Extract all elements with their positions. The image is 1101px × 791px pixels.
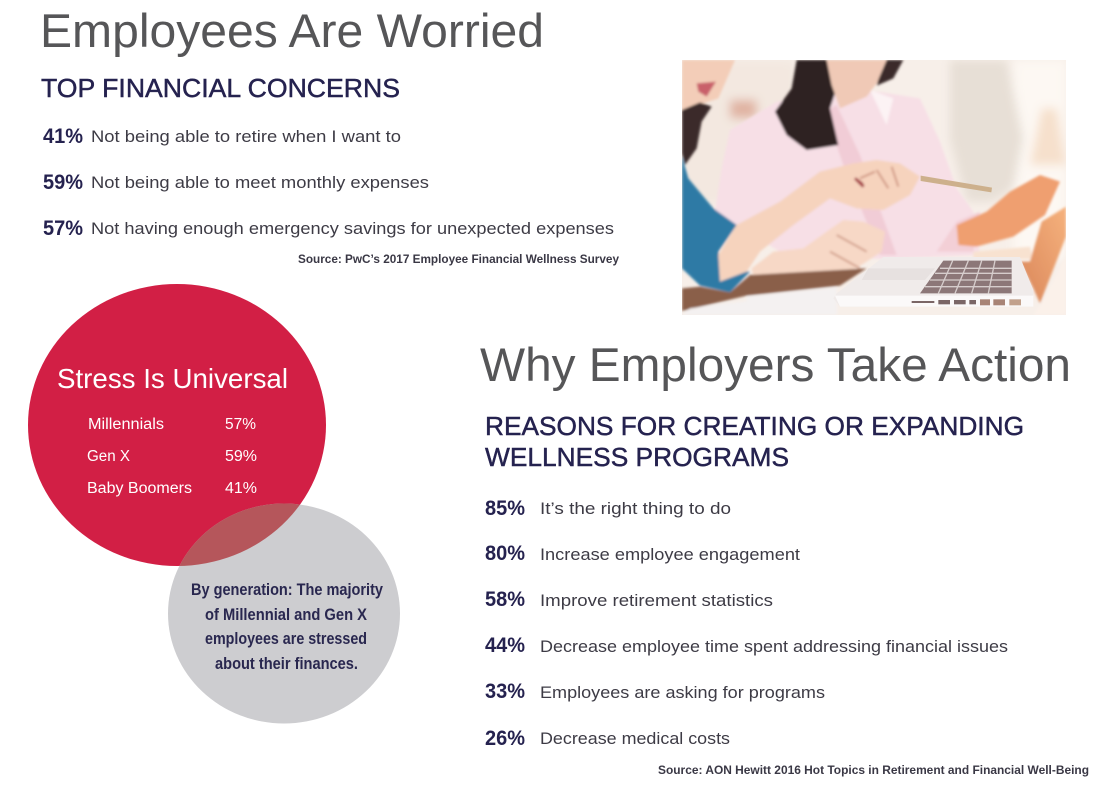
panel: reasons for wellness programs [485, 411, 1089, 777]
laptop base [862, 257, 1034, 292]
reason: asking for programs: Employees are asking for programs [540, 683, 825, 702]
circle: grey generation note [168, 504, 400, 724]
heading: reasons: REASONS FOR CREATING OR EXPANDING [485, 411, 1024, 441]
row: gen x: 59% [225, 448, 257, 465]
title: Why Employers Take Action: Why Employers Take Action [480, 338, 1071, 391]
cuff [937, 212, 980, 252]
source: PwC: Source: PwC’s 2017 Employee Financial Wellness Survey [298, 254, 620, 266]
concern: monthly expenses: 59% [43, 171, 83, 194]
reason: right thing: It’s the right thing to do [540, 499, 731, 518]
reason: engagement: 80% [485, 542, 525, 565]
row: millennials: Millennials [88, 416, 164, 433]
reason: medical costs: 26% [485, 727, 525, 750]
reason: asking for programs: 33% [485, 680, 525, 703]
concern: monthly expenses [43, 171, 429, 194]
reason: asking for programs [485, 680, 825, 703]
right hand [957, 175, 1060, 247]
ports [912, 299, 1021, 305]
concern: emergency savings: 57% [43, 217, 83, 240]
reason: time spent: Decrease employee time spent addressing financial issues [540, 637, 1008, 656]
keyboard [920, 261, 1012, 293]
pen hand details [860, 167, 898, 188]
text: generation note: about their finances. [215, 655, 358, 673]
reason: medical costs: Decrease medical costs [540, 729, 730, 748]
reason: right thing: 85% [485, 497, 525, 520]
concern: retire: 41% [43, 125, 83, 148]
concern: retire [43, 125, 401, 148]
heading: stress is universal: Stress Is Universal [57, 363, 288, 394]
lower hand [752, 220, 885, 277]
table [682, 268, 867, 311]
row: millennials [88, 416, 256, 433]
heading: reasons [485, 411, 1024, 472]
forearm [718, 160, 920, 282]
reason: time spent: 44% [485, 634, 525, 657]
reason: right thing [485, 497, 731, 520]
row: millennials: 57% [225, 416, 256, 433]
circle: red stress is universal [28, 284, 326, 566]
concern: retire: Not being able to retire when I want to [91, 127, 401, 146]
text: generation note: By generation: The majority [191, 581, 384, 599]
laptop screen [1020, 207, 1066, 303]
reason: time spent [485, 634, 1008, 657]
panel: top financial concerns [41, 73, 620, 266]
row: gen x [87, 448, 257, 465]
concern: emergency savings: Not having enough emergency savings for unexpected expenses [91, 219, 614, 238]
blue sleeve [682, 157, 750, 292]
text: generation note: of Millennial and Gen X [205, 606, 367, 624]
source: AON Hewitt: Source: AON Hewitt 2016 Hot Topics in Retirement and Financial Well-Being [658, 765, 1089, 777]
text: generation note [191, 581, 384, 673]
row: baby boomers: 41% [225, 480, 257, 497]
reason: retirement statistics: 58% [485, 588, 525, 611]
reason: retirement statistics [485, 588, 773, 611]
reason: engagement: Increase employee engagement [540, 545, 800, 564]
row: baby boomers: Baby Boomers [87, 480, 192, 497]
row: baby boomers [87, 480, 257, 497]
concern: monthly expenses: Not being able to meet monthly expenses [91, 173, 429, 192]
heading: top financial concerns: TOP FINANCIAL CONCERNS [41, 73, 400, 103]
papers [682, 288, 837, 315]
title: Employees Are Worried: Employees Are Worried [40, 4, 544, 57]
reason: medical costs [485, 727, 730, 750]
text: generation note: employees are stressed [205, 630, 367, 648]
pencil [921, 176, 992, 192]
venn diagram: stress [28, 284, 400, 724]
hair [775, 60, 838, 150]
heading: reasons: WELLNESS PROGRAMS [485, 442, 789, 472]
neck and faces [827, 60, 887, 108]
photo: two women at a laptop [682, 60, 1067, 315]
shirt [715, 90, 980, 259]
reason: retirement statistics: Improve retirement statistics [540, 591, 773, 610]
reason: engagement [485, 542, 800, 565]
row: gen x: Gen X [87, 448, 131, 465]
